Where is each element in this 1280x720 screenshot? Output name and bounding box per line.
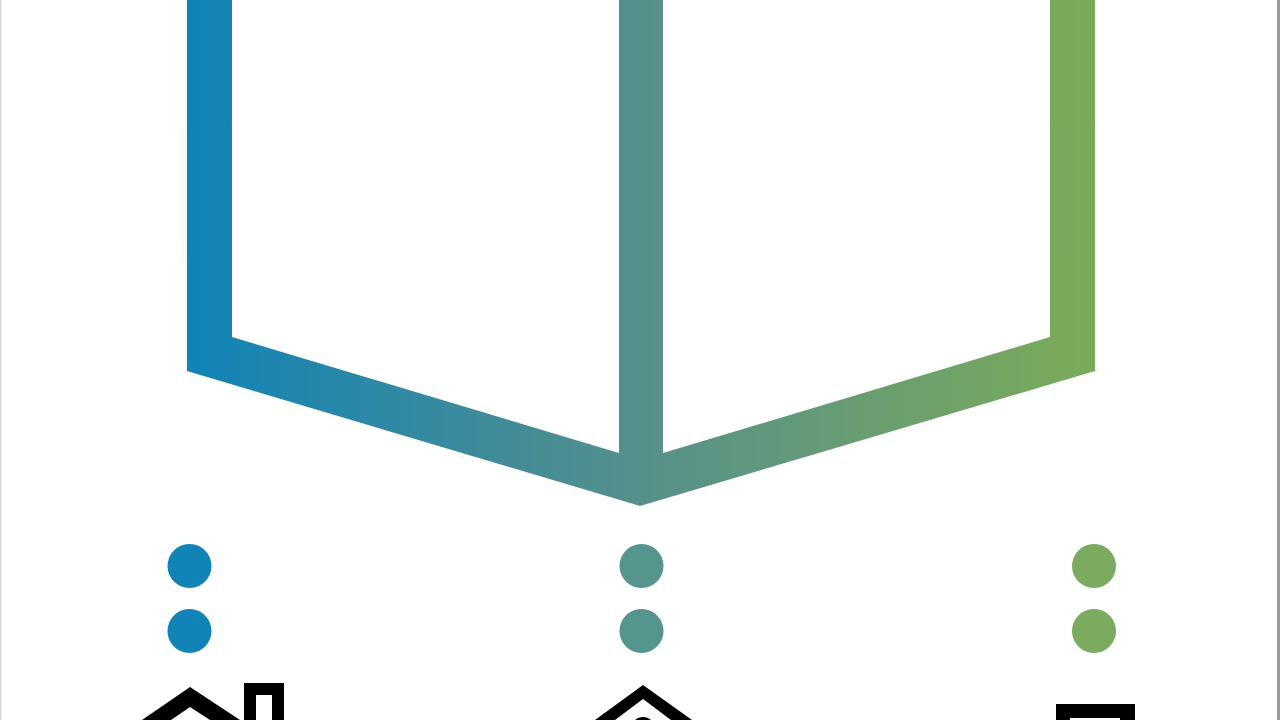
- connector dots: centre: [620, 544, 664, 653]
- icon: house with person: [595, 685, 692, 720]
- connector dots: right: [1072, 544, 1116, 653]
- icon: house with chimney: [142, 683, 284, 720]
- open box outline: [187, 0, 1095, 506]
- icon: building: [1056, 704, 1135, 720]
- connector dots: left: [168, 544, 212, 653]
